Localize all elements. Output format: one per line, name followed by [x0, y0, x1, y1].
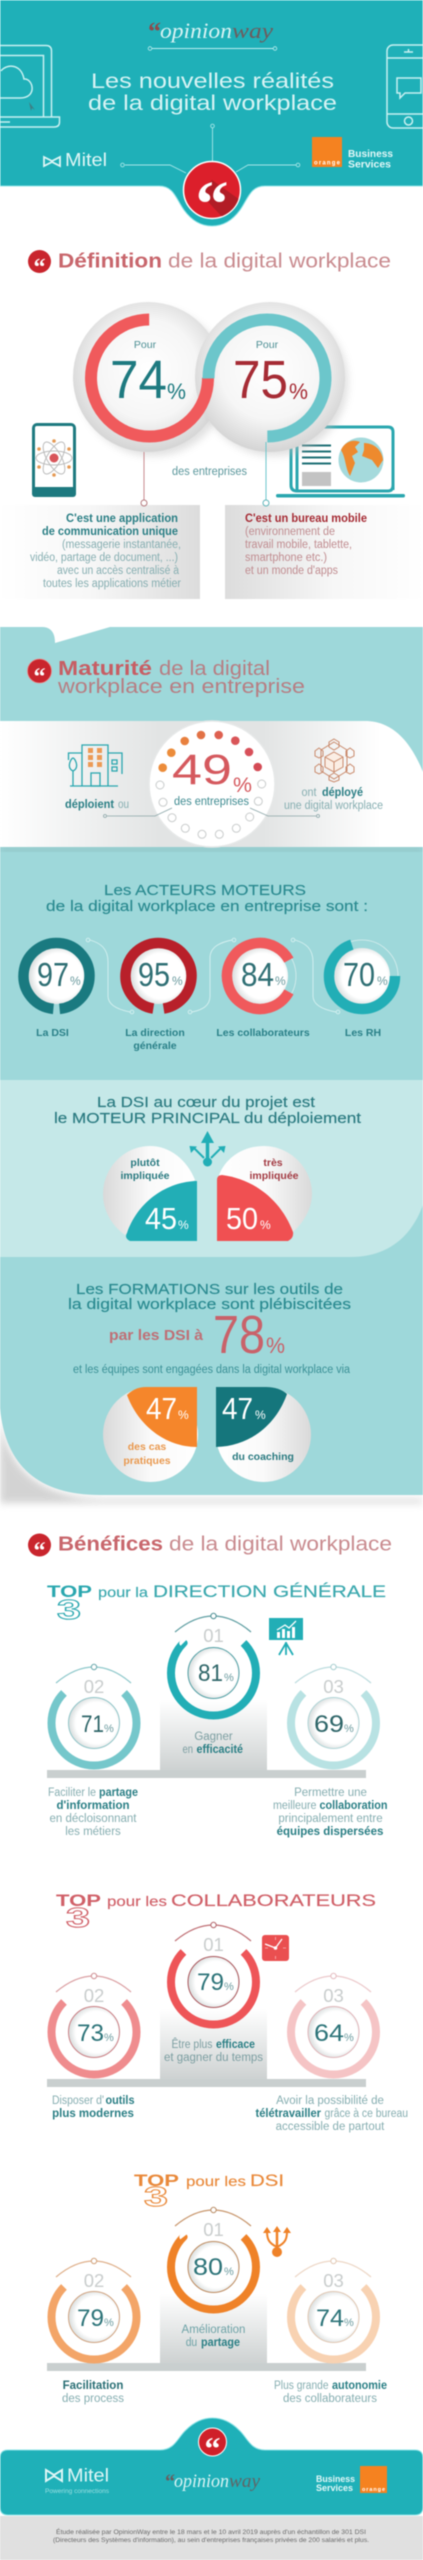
- heading: la digital workplace sont plébiscitées: [68, 1296, 351, 1313]
- panel: formations: [68, 1281, 351, 1490]
- ring: La DSI 97 percent: La DSI: [36, 1027, 69, 1039]
- logo: opinionway: “: [165, 2471, 175, 2493]
- ring 02: 71 percent: %: [104, 1723, 114, 1735]
- pie: plutot impliquee 45 percent: %: [178, 1218, 189, 1232]
- heading: Bénéfices: [28, 1534, 392, 1564]
- title: [88, 70, 337, 115]
- panel: box left: toutes les applications métier: [43, 578, 181, 590]
- heading: [134, 2171, 284, 2212]
- panel: box left: avec un accès centralisé à: [57, 565, 180, 577]
- logo: Orange Business Services: [312, 137, 393, 170]
- label: deploient ou: déploient: [65, 799, 114, 811]
- panel: DSI moteur principal: [0, 1080, 423, 1257]
- ring: Les collaborateurs 84 percent: %: [275, 974, 286, 988]
- ring 03: 74 percent: %: [344, 2317, 354, 2329]
- panel: top 3 DSI: [34, 2171, 394, 2405]
- panel: box right: et un monde d'apps: [245, 565, 338, 577]
- ring: Les RH 70 percent: %: [377, 974, 388, 988]
- label: 74 percent: %: [167, 379, 186, 404]
- icon: building: [68, 745, 122, 786]
- ring: 74 percent: [91, 320, 208, 436]
- heading: acteurs moteurs: de la digital workplace en entreprise sont :: [46, 898, 368, 915]
- ring 03: 69 percent: 03: [323, 1676, 344, 1697]
- ring 03: 64 percent: 64: [314, 2020, 344, 2047]
- text: amelioration du partage: [182, 2324, 245, 2349]
- pie: des cas pratiques 47 percent: [103, 1380, 202, 1490]
- logo: Orange Business Services: Services: [348, 160, 391, 170]
- ring 01: 81 percent: [153, 1613, 274, 1733]
- pie: plutot impliquee 45 percent: 45: [145, 1201, 177, 1236]
- text: outils plus modernes: Disposer d': [52, 2095, 104, 2107]
- icon: smartphone with chat bubble: [387, 45, 423, 128]
- text: partage d'information: les métiers: [65, 1826, 121, 1838]
- circle: 49 percent: des entreprises: [174, 796, 249, 808]
- heading: pour les: [107, 1893, 167, 1909]
- ring 03: 64 percent: %: [344, 2032, 354, 2044]
- icon: red quote badge: “: [204, 2430, 220, 2466]
- text: teletravailler: Avoir la possibilité de: [276, 2095, 384, 2107]
- ring 01: 81 percent: 01: [203, 1625, 224, 1646]
- panel: top 3 collaborateurs: [34, 1891, 408, 2133]
- ring 03: 64 percent: [273, 1972, 394, 2092]
- text: teletravailler: accessible de partout: [276, 2121, 385, 2133]
- label: 74 percent: Pour: [134, 339, 157, 351]
- text: etre plus efficace: efficace: [216, 2039, 255, 2051]
- header background: [0, 0, 423, 226]
- ring: La direction generale 95 percent: 95: [138, 956, 170, 993]
- pedestal: [160, 2009, 267, 2080]
- ring 02: 73 percent: %: [104, 2032, 114, 2044]
- heading: TOP: [47, 1582, 92, 1601]
- ring 01: 79 percent: [153, 1922, 274, 2042]
- heading: DSI: [250, 2171, 284, 2190]
- logo: Mitel: [44, 150, 107, 170]
- ring: Les RH 70 percent: Les RH: [345, 1027, 381, 1039]
- text: amelioration du partage: partage: [201, 2337, 240, 2349]
- pie: des cas pratiques 47 percent: %: [178, 1408, 189, 1422]
- circle: 49 percent: [149, 721, 275, 847]
- label: 75 percent: [233, 339, 308, 410]
- text: outils plus modernes: [52, 2095, 134, 2120]
- pedestal: [160, 1700, 267, 1771]
- panel: maturity background: [0, 627, 423, 1503]
- pie: du coaching 47 percent: 47: [222, 1391, 253, 1426]
- ring 03: 69 percent: [273, 1663, 394, 1783]
- text: meilleure collaboration: Permettre une: [294, 1787, 367, 1799]
- panel: box left: (messagerie instantanée,: [62, 539, 181, 551]
- heading: pour les: [186, 2173, 246, 2189]
- text: facilitation des process: des process: [62, 2393, 124, 2405]
- caption: des entreprises: des entreprises: [172, 466, 247, 478]
- ring 01: 81 percent: %: [224, 1672, 234, 1684]
- label: 75 percent: 75: [233, 350, 288, 410]
- pie: des cas pratiques 47 percent: des cas: [128, 1441, 166, 1453]
- ring 01: 79 percent: 01: [203, 1934, 224, 1955]
- ring 03: 64 percent: 03: [323, 1985, 344, 2006]
- text: plus grande autonomie: autonomie: [332, 2380, 387, 2392]
- logo: opinionway: way: [232, 18, 273, 43]
- icon: clock: [262, 1935, 289, 1961]
- title: de la digital workplace: [88, 92, 337, 115]
- heading: [56, 1891, 376, 1933]
- icon: cubes network: [315, 739, 354, 782]
- label: 75 percent: Pour: [256, 339, 279, 351]
- ring 03: 74 percent: 74: [316, 2305, 344, 2332]
- pedestal: [160, 2294, 267, 2364]
- label: ont deploye: [284, 787, 383, 812]
- ring: Les RH 70 percent: 70: [343, 956, 375, 993]
- heading: TOP: [56, 1891, 101, 1910]
- heading: La DSI au cœur du projet est: [97, 1094, 316, 1111]
- heading: Maturité: de la digital: [159, 658, 270, 680]
- pie: tres impliquee 50 percent: [217, 1146, 312, 1241]
- logo: Orange Business Services: orange: [362, 2487, 385, 2493]
- ring: La DSI 97 percent: %: [70, 974, 81, 988]
- footnote: (Directeurs des Systèmes d'information), au sein d'entreprises françaises privées de 200 salariés et plus.: [53, 2537, 369, 2544]
- heading: [54, 1094, 362, 1127]
- connector lines: [104, 808, 320, 818]
- heading: Les FORMATIONS sur les outils de: [76, 1281, 343, 1298]
- heading: Maturité: “: [34, 664, 46, 690]
- heading: Définition: [28, 250, 391, 281]
- heading: Maturité: [28, 658, 305, 698]
- pie: du coaching 47 percent: %: [255, 1408, 266, 1422]
- text: partage d'information: [48, 1787, 138, 1838]
- heading: [47, 1582, 386, 1625]
- ring 03: 69 percent: 69: [314, 1711, 344, 1738]
- pie: des cas pratiques 47 percent: 47: [146, 1391, 177, 1426]
- heading: [68, 1281, 351, 1313]
- panel: header: [0, 0, 423, 241]
- logo: opinionway: opinion: [160, 18, 232, 43]
- ring: La DSI 97 percent: 97: [37, 956, 69, 993]
- heading: le MOTEUR PRINCIPAL du déploiement: [54, 1110, 362, 1127]
- icon: three arrows: [190, 1131, 226, 1166]
- heading: Définition: de la digital workplace: [168, 250, 391, 272]
- label: 75 percent: %: [289, 379, 308, 404]
- ring: La direction generale 95 percent: [121, 938, 196, 1052]
- icon: red quote badge: “: [196, 168, 228, 241]
- panel: box right: travail mobile, tablette,: [245, 539, 352, 551]
- sphere right: [200, 308, 348, 456]
- stat: 78 percent: 78: [213, 1305, 265, 1365]
- text: plus grande autonomie: [274, 2380, 387, 2405]
- circle: 49 percent: %: [233, 774, 252, 797]
- label: ont deploye: déployé: [322, 787, 363, 799]
- ring: Les RH 70 percent: [326, 940, 398, 1039]
- icon: presentation chart: [269, 1618, 303, 1655]
- logo: opinionway: opinion: [174, 2471, 229, 2492]
- heading: Définition: “: [34, 255, 46, 281]
- heading: pour la: [98, 1584, 148, 1600]
- text: outils plus modernes: plus modernes: [52, 2108, 134, 2120]
- ring: La direction generale 95 percent: %: [172, 974, 183, 988]
- ring: Les collaborateurs 84 percent: [215, 931, 310, 1039]
- ring: Les collaborateurs 84 percent: 84: [241, 956, 274, 993]
- ring: Les collaborateurs 84 percent: Les collaborateurs: [216, 1027, 310, 1039]
- heading: 3: [57, 1594, 81, 1625]
- ring 02: 73 percent: 02: [84, 1985, 104, 2006]
- text: meilleure collaboration: équipes dispersées: [277, 1826, 383, 1838]
- circle: 49 percent: 49: [172, 746, 232, 794]
- text: gagner en efficacite: Gagner: [194, 1731, 233, 1743]
- label: ont deploye: ont: [302, 787, 317, 799]
- pie: plutot impliquee 45 percent: [103, 1146, 197, 1241]
- logo: Mitel: Mitel: [65, 150, 107, 170]
- panel: box right: (environnement de: [245, 526, 335, 538]
- panel: definition chart: [0, 302, 423, 599]
- text: amelioration du partage: du: [186, 2337, 197, 2349]
- pie: du coaching 47 percent: du coaching: [232, 1451, 294, 1463]
- text: amelioration du partage: Amélioration: [182, 2324, 245, 2336]
- icon: laptop with cloud: [0, 46, 60, 127]
- footnote band: [0, 2516, 423, 2560]
- caption: et les équipes sont engagées dans la digital workplace via: [73, 1364, 351, 1376]
- ring: La DSI 97 percent: [21, 940, 92, 1039]
- ring 01: 80 percent: 80: [193, 2254, 223, 2281]
- heading: 3: [144, 2181, 168, 2212]
- text: gagner en efficacite: en: [182, 1744, 193, 1756]
- label: deploient ou: ou: [118, 799, 129, 811]
- connector lines: [121, 124, 300, 173]
- footer background: [0, 2418, 423, 2515]
- pie: tres impliquee 50 percent: 50: [226, 1201, 258, 1236]
- text: meilleure collaboration: principalement entre: [278, 1813, 383, 1825]
- heading: Bénéfices: “: [34, 1538, 46, 1564]
- heading: Maturité: Maturité: [58, 658, 152, 680]
- text: teletravailler: [256, 2095, 408, 2133]
- text: etre plus efficace: Être plus: [172, 2038, 213, 2051]
- label: 74 percent: 74: [110, 350, 167, 410]
- heading: Bénéfices: Bénéfices: [58, 1534, 163, 1556]
- panel: box left: C'est une application: [66, 513, 178, 525]
- panel: box right: C'est un bureau mobile: [245, 513, 367, 525]
- logo: Orange Business Services: Business: [348, 149, 393, 160]
- pie: tres impliquee 50 percent: très: [263, 1157, 283, 1169]
- pie: des cas pratiques 47 percent: pratiques: [123, 1455, 171, 1467]
- pie: tres impliquee 50 percent: impliquée: [249, 1170, 299, 1182]
- pie: plutot impliquee 45 percent: plutôt: [130, 1157, 160, 1169]
- ring 01: 80 percent: %: [224, 2266, 234, 2278]
- logo: Orange Business Services: [316, 2466, 387, 2494]
- panel: box left: de communication unique: [42, 526, 178, 538]
- text: partage d'information: Faciliter le: [48, 1787, 96, 1799]
- panel: box left: [0, 452, 200, 599]
- ring 01: 79 percent: 79: [197, 1969, 224, 1996]
- text: meilleure collaboration: meilleure: [273, 1800, 316, 1812]
- text: partage d'information: partage: [99, 1787, 138, 1799]
- panel: footer: [0, 2418, 423, 2560]
- footnote: Étude réalisée par OpinionWay entre le 18 mars et le 10 avril 2019 auprès d'un échantillon de 301 DSI: [56, 2527, 366, 2536]
- heading: Bénéfices: de la digital workplace: [169, 1534, 392, 1556]
- ring 03: 69 percent: %: [344, 1723, 354, 1735]
- text: meilleure collaboration: collaboration: [320, 1800, 388, 1812]
- pie: plutot impliquee 45 percent: impliquée: [120, 1170, 170, 1182]
- text: meilleure collaboration: [273, 1787, 388, 1838]
- text: plus grande autonomie: des collaborateurs: [283, 2393, 377, 2405]
- logo: opinionway: “: [148, 17, 161, 46]
- panel: top 3 direction generale: [34, 1582, 394, 1838]
- label: ont deploye: une digital workplace: [284, 800, 383, 812]
- text: facilitation des process: Facilitation: [63, 2380, 123, 2392]
- panel: box right: smartphone etc.): [245, 552, 327, 564]
- heading: Définition: Définition: [58, 250, 162, 272]
- ring: La direction generale 95 percent: générale: [133, 1040, 177, 1052]
- ring 02: 71 percent: [34, 1663, 154, 1783]
- footnote: [53, 2527, 369, 2544]
- text: teletravailler: grâce à ce bureau: [324, 2108, 408, 2120]
- ring: La direction generale 95 percent: La direction: [125, 1027, 185, 1039]
- ring 01: 81 percent: 81: [198, 1660, 223, 1687]
- heading: 3: [66, 1902, 90, 1933]
- ring 01: 80 percent: [153, 2207, 274, 2327]
- ring 02: 79 percent: [34, 2257, 154, 2377]
- text: etre plus efficace: [164, 2038, 263, 2064]
- ring 01: 80 percent: 01: [203, 2219, 224, 2240]
- heading: TOP: [134, 2171, 179, 2190]
- ring 02: 71 percent: 02: [84, 1676, 104, 1697]
- icon: smartphone with atom: [32, 424, 76, 497]
- icon: trident arrows: [263, 2226, 291, 2257]
- sphere left: [79, 308, 227, 456]
- heading: COLLABORATEURS: [171, 1891, 376, 1910]
- logo: Mitel: Mitel: [67, 2466, 109, 2486]
- ring 02: 73 percent: [34, 1972, 154, 2092]
- text: teletravailler: télétravailler: [256, 2108, 322, 2120]
- ring 02: 79 percent: %: [104, 2317, 114, 2329]
- panel: maturity band: [0, 721, 423, 851]
- ring 02: 79 percent: 79: [77, 2305, 104, 2332]
- connector curves between rings: [86, 938, 340, 1014]
- ring 02: 71 percent: 71: [81, 1711, 104, 1738]
- logo: Mitel: [45, 2466, 109, 2495]
- pie: tres impliquee 50 percent: %: [260, 1218, 271, 1232]
- ring 02: 73 percent: 73: [77, 2020, 104, 2047]
- ring 03: 74 percent: [273, 2257, 394, 2377]
- heading: Maturité: workplace en entreprise: [57, 676, 305, 698]
- text: partage d'information: en décloisonnant: [50, 1813, 137, 1825]
- panel: box left: vidéo, partage de document, ...): [30, 552, 178, 564]
- stat: 78 percent: %: [266, 1333, 285, 1358]
- ring 03: 74 percent: 03: [323, 2270, 344, 2291]
- panel: box right: [225, 442, 423, 599]
- text: facilitation des process: [62, 2380, 124, 2405]
- pie: du coaching 47 percent: [212, 1380, 311, 1490]
- icon: red quote badge: [198, 2428, 226, 2466]
- logo: opinionway: way: [229, 2471, 261, 2492]
- icon: laptop with globe: [276, 427, 405, 498]
- text: partage d'information: d'information: [56, 1800, 130, 1812]
- logo: opinionway: [165, 2471, 261, 2493]
- text: gagner en efficacite: [182, 1731, 243, 1756]
- stat: 78 percent: [109, 1305, 285, 1365]
- stat: 78 percent: par les DSI à: [109, 1328, 204, 1344]
- heading: acteurs moteurs: [46, 882, 368, 915]
- text: outils plus modernes: outils: [106, 2095, 134, 2107]
- heading: DIRECTION GÉNÉRALE: [153, 1582, 386, 1601]
- logo: Mitel: Powering connections: [45, 2489, 109, 2495]
- logo: opinionway: [148, 17, 277, 50]
- heading: acteurs moteurs: Les ACTEURS MOTEURS: [104, 882, 306, 899]
- label: 74 percent: [110, 339, 186, 410]
- logo: Orange Business Services: orange: [314, 160, 341, 166]
- title: Les nouvelles réalités: [91, 70, 334, 93]
- logo: Orange Business Services: Services: [316, 2483, 353, 2494]
- ring 01: 79 percent: %: [224, 1981, 234, 1993]
- text: etre plus efficace: et gagner du temps: [164, 2052, 263, 2064]
- ring: 75 percent: [208, 320, 326, 436]
- icon: red quote badge: [182, 160, 242, 220]
- text: plus grande autonomie: Plus grande: [274, 2380, 328, 2392]
- text: gagner en efficacite: efficacité: [196, 1744, 243, 1756]
- logo: Orange Business Services: Business: [316, 2474, 355, 2485]
- ring 02: 79 percent: 02: [84, 2270, 104, 2291]
